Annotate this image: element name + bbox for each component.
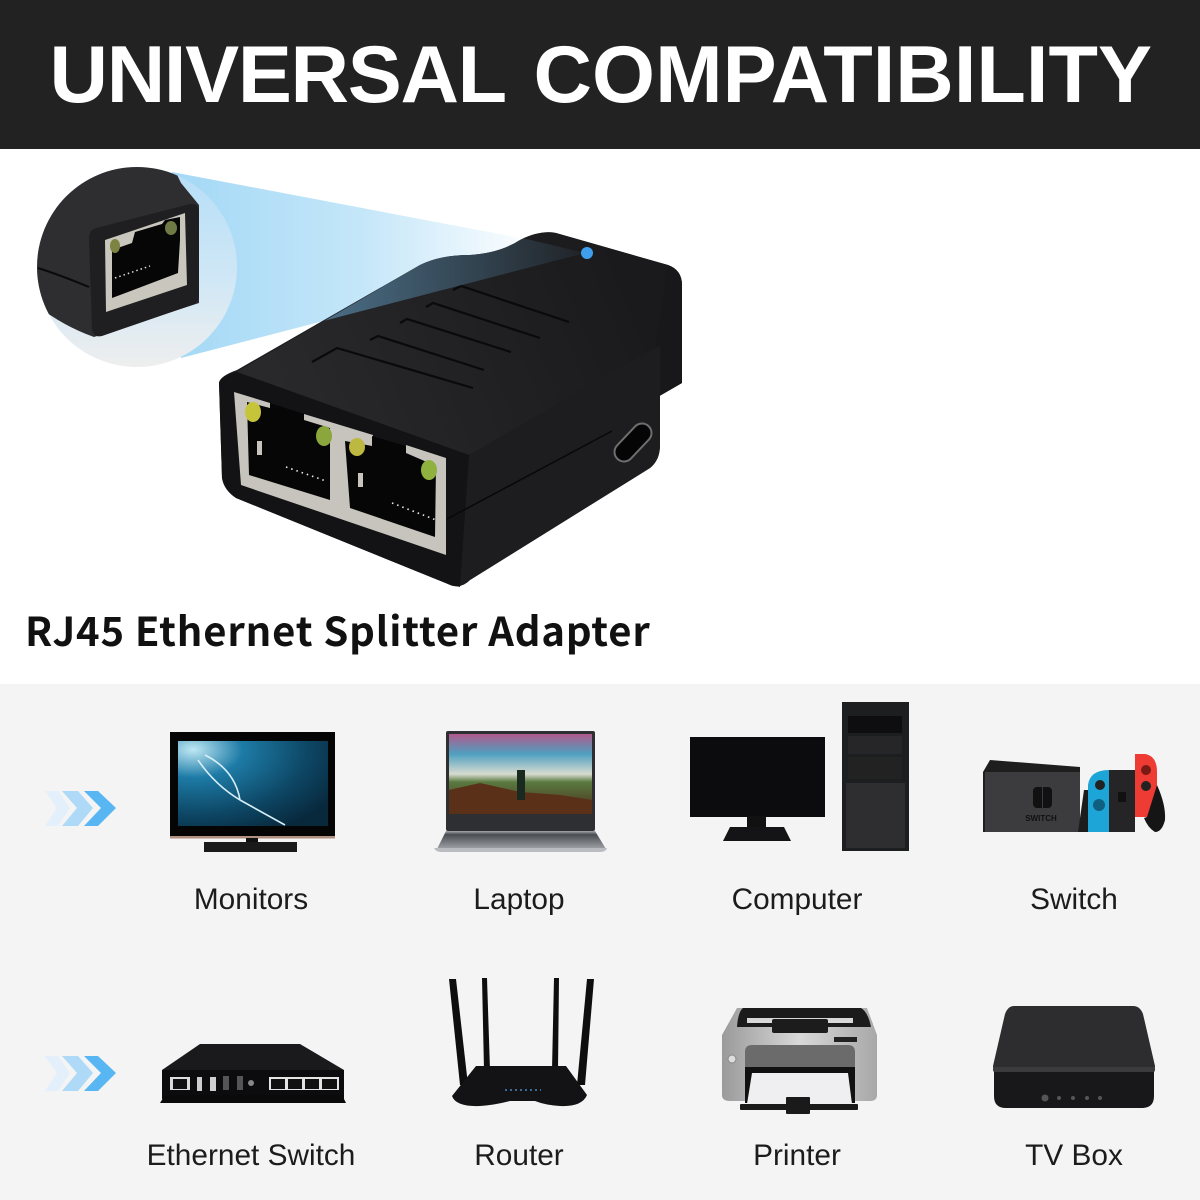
label: TV Box: TV Box xyxy=(1025,1139,1123,1172)
icon: printer xyxy=(722,1008,877,1114)
power LED xyxy=(581,247,593,259)
icon: TV box xyxy=(993,1006,1155,1108)
icon: ethernet switch xyxy=(160,1044,346,1103)
adapter body xyxy=(219,232,682,587)
icon: computer xyxy=(690,702,909,851)
top grooves xyxy=(312,286,569,388)
magnified port circle xyxy=(30,160,237,367)
title banner xyxy=(0,0,1200,149)
label: Printer: Printer xyxy=(753,1139,841,1172)
label: Router: Router xyxy=(474,1139,564,1172)
beam overlay on body xyxy=(324,238,581,321)
panel: devices background xyxy=(0,684,1200,1200)
label: Computer: Computer xyxy=(732,883,862,916)
arrows row 2 xyxy=(45,1056,116,1091)
USB-C port xyxy=(624,433,642,452)
icon: game console: SWITCH xyxy=(1025,814,1057,823)
title banner: UNIVERSAL xyxy=(50,30,506,120)
label: Laptop: Laptop xyxy=(473,883,565,916)
RJ45 frame and ports xyxy=(234,392,446,555)
magnifier light beam xyxy=(172,172,585,358)
icon: router xyxy=(449,978,594,1106)
product heading: RJ45 Ethernet Splitter Adapter xyxy=(25,600,651,658)
title banner: COMPATIBILITY xyxy=(534,30,1152,120)
icon: game console xyxy=(983,754,1165,832)
icon: laptop xyxy=(434,731,607,852)
label: Ethernet Switch: Ethernet Switch xyxy=(147,1139,355,1172)
arrows row 1 xyxy=(45,791,116,826)
illustration and icons xyxy=(37,167,1166,1114)
label: Monitors: Monitors xyxy=(194,883,308,916)
label: Switch: Switch xyxy=(1030,883,1118,916)
icon: monitor xyxy=(170,732,335,852)
